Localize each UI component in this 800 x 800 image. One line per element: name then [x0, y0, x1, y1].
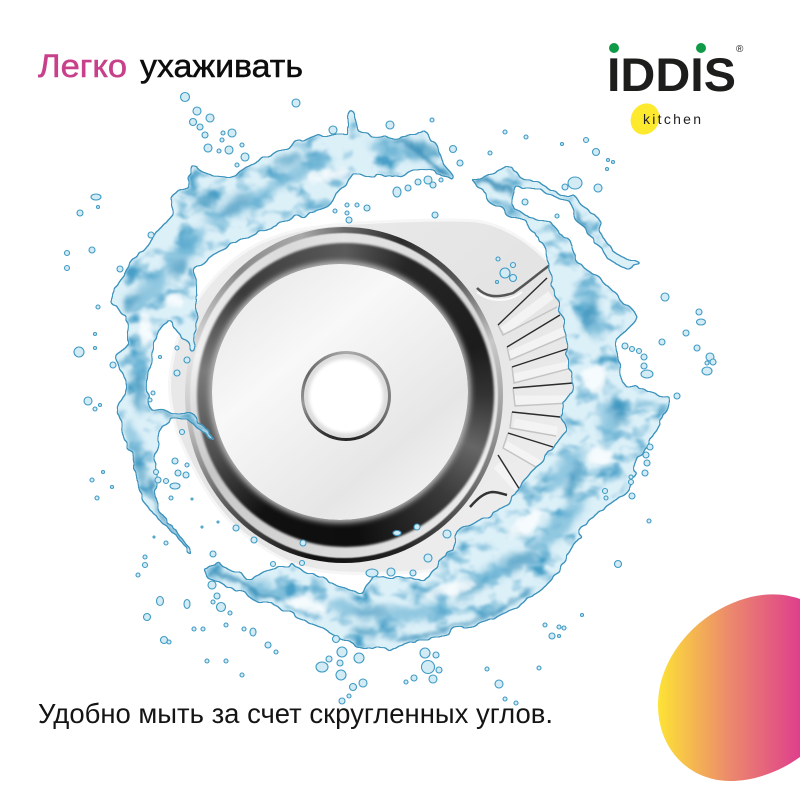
- title: ухаживать: [140, 48, 303, 84]
- water: interior shading: [117, 116, 668, 648]
- drain ring: [304, 354, 388, 438]
- sink bowl dark ring: [197, 243, 494, 547]
- logo: IDDIS kitchen: IDDIS: [607, 48, 736, 101]
- sink bowl flat: [212, 264, 468, 520]
- logo: IDDIS kitchen: kitchen: [643, 111, 701, 127]
- title: Легко: [38, 48, 127, 84]
- caption: Удобно мыть за счет скругленных углов.: [38, 698, 553, 729]
- logo: IDDIS kitchen: ®: [736, 44, 744, 55]
- sink rim: [185, 227, 503, 563]
- water splashes: [64, 92, 716, 706]
- water: top-left arc: [110, 112, 452, 553]
- drain hole: [309, 359, 383, 433]
- drain outer ring: [301, 351, 391, 441]
- drainboard grooves: [497, 278, 573, 490]
- water droplets: [64, 92, 716, 705]
- water: right and bottom wave: [205, 167, 670, 647]
- sink rim highlight: [190, 233, 498, 558]
